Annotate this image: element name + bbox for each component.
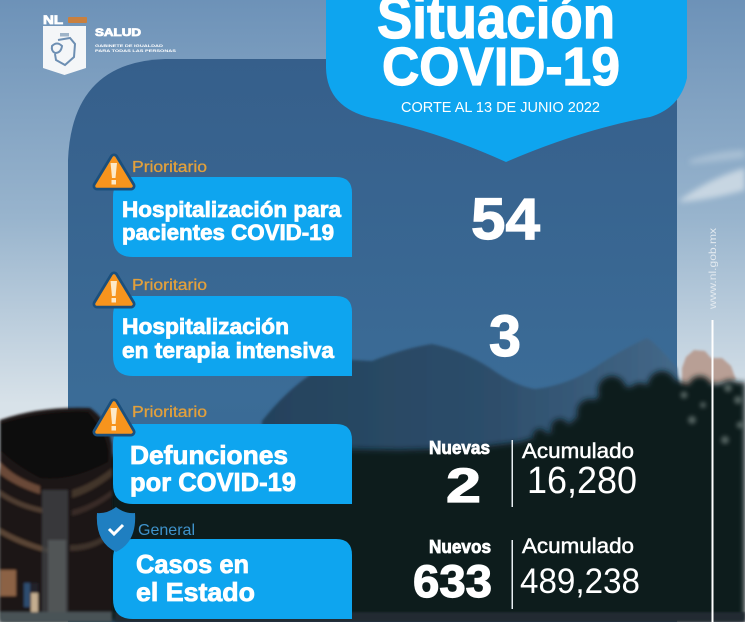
logo tagline — [95, 44, 177, 53]
title: COVID-19 — [382, 37, 620, 97]
stats: cases new: Nuevos — [429, 537, 491, 557]
panel: hospitalization card: pacientes COVID-19 — [122, 220, 334, 245]
panel: cases card — [113, 539, 352, 619]
panel: hospitalization card — [113, 177, 352, 257]
background: rock peak on the right — [682, 350, 736, 390]
logo SALUD: SALUD — [95, 27, 141, 39]
panel: intensive care card: en terapia intensiva — [122, 338, 335, 363]
label: General: General — [138, 522, 195, 539]
panel: hospitalization card: Hospitalización para — [122, 197, 342, 222]
panel: cases card: el Estado — [136, 577, 255, 607]
stats: deaths new — [429, 438, 490, 513]
logo shield — [43, 26, 86, 75]
background: fountain sculpture — [0, 408, 112, 622]
panel: deaths card: Defunciones — [130, 440, 288, 470]
stats: deaths accumulated: 16,280 — [527, 460, 637, 502]
background: trees and ground — [0, 371, 745, 622]
stats: deaths accumulated — [522, 440, 637, 502]
panel: deaths card — [113, 424, 352, 504]
website rule line — [712, 320, 714, 622]
logo tagline: GABINETE DE IGUALDAD — [95, 44, 164, 48]
logo: NL Salud — [43, 13, 177, 75]
stats: deaths new: 2 — [446, 460, 481, 513]
icon: warning triangle 3 — [97, 403, 131, 432]
website url: www.nl.gob.mx — [707, 227, 719, 310]
icon: warning triangle 1 — [97, 158, 131, 186]
label: Prioritario 3: Prioritario — [132, 404, 207, 421]
logo wordmark NL: NL — [43, 13, 63, 27]
stats: deaths accumulated: Acumulado — [522, 440, 634, 463]
stats: cases accumulated: 489,238 — [520, 562, 640, 601]
panel: cases card: Casos en — [136, 549, 249, 579]
value: 54: 54 — [471, 187, 540, 252]
panel: dark blue content area — [68, 59, 677, 622]
background: mountain range — [262, 338, 690, 470]
stats: cases accumulated — [520, 535, 640, 601]
subtitle: date: CORTE AL 13 DE JUNIO 2022 — [401, 99, 600, 116]
stats: cases new: 633 — [413, 556, 492, 607]
panel: intensive care card: Hospitalización — [122, 314, 289, 339]
header: blue banner — [326, 0, 687, 162]
background: lighter leaf speckles — [680, 384, 744, 444]
label: Prioritario 2: Prioritario — [132, 277, 207, 294]
icon: shield check — [97, 507, 135, 552]
panel: intensive care card — [113, 296, 352, 376]
logo tagline: PARA TODAS LAS PERSONAS — [95, 49, 177, 53]
value: 3: 3 — [489, 304, 521, 369]
stats: deaths new: Nuevas — [429, 438, 490, 458]
label: Prioritario 1: Prioritario — [132, 159, 207, 176]
icon: warning triangle 2 — [97, 276, 131, 304]
panel: deaths card: por COVID-19 — [130, 467, 296, 497]
logo orange tag — [68, 17, 87, 23]
background: dark ground strip — [115, 612, 745, 622]
stats: cases new — [413, 537, 492, 607]
title — [377, 0, 620, 97]
stats: cases accumulated: Acumulado — [522, 535, 634, 558]
